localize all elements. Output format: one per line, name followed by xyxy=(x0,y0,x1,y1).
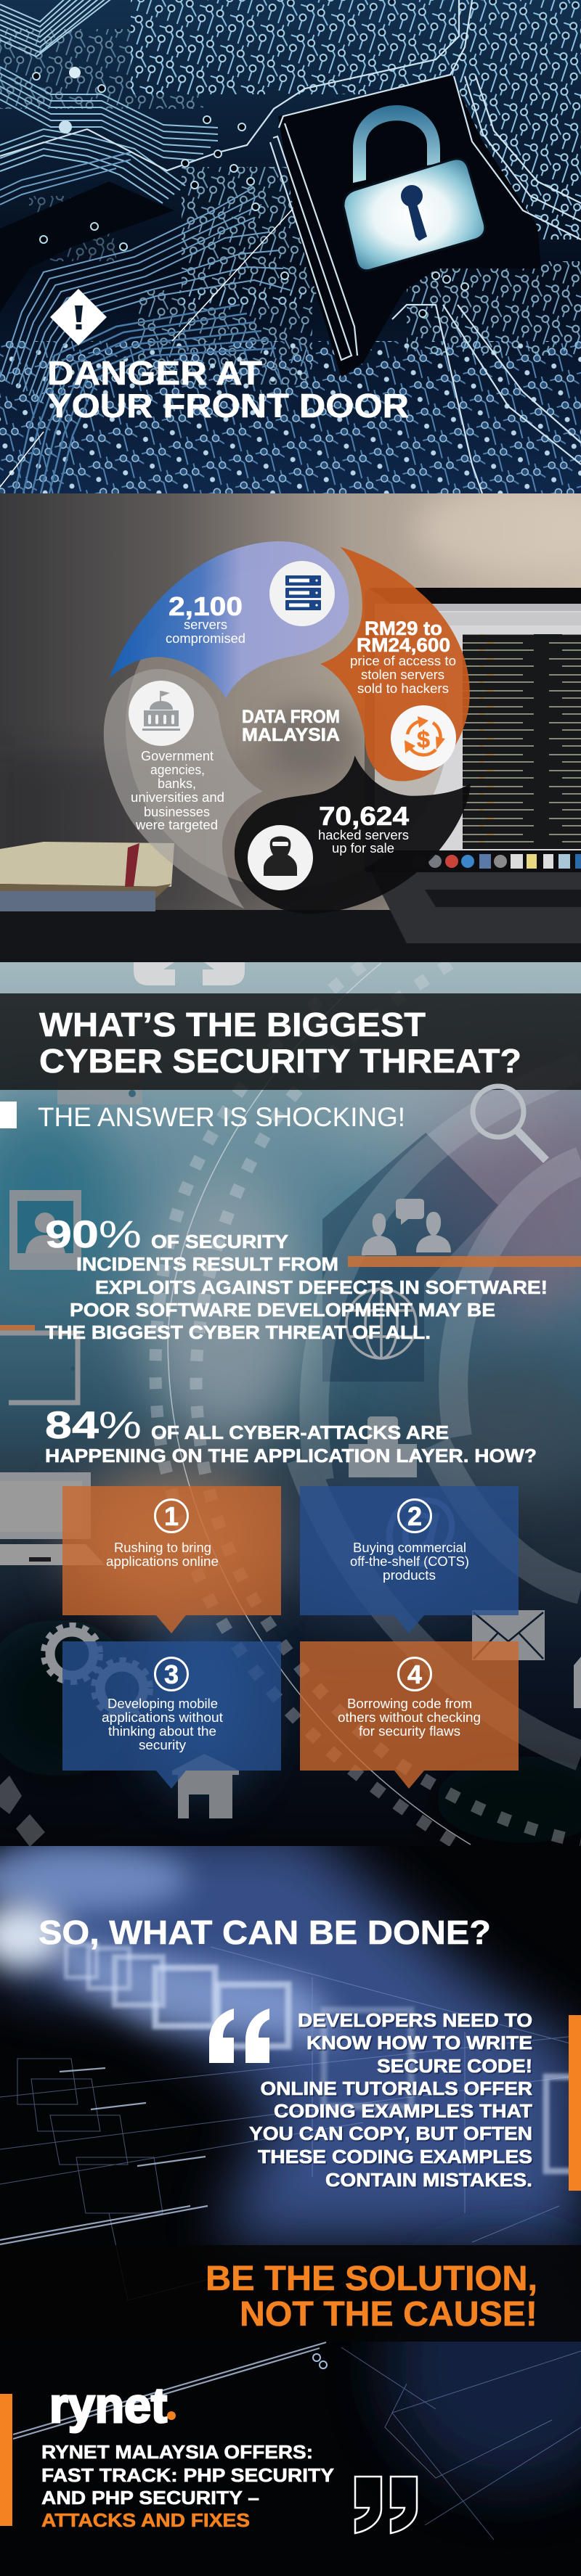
icon: magnifier xyxy=(473,1086,546,1160)
icon: envelope xyxy=(472,1610,545,1660)
text: targets: were targeted xyxy=(135,818,218,832)
text: developers quote: YOU CAN COPY, BUT OFTEN xyxy=(249,2124,532,2144)
card 1: rushing: Rushing to bring xyxy=(114,1541,211,1555)
icon: globe xyxy=(346,1289,416,1358)
text: servers compromised: compromised xyxy=(166,631,245,646)
icon: dollar cycle: $ xyxy=(417,726,430,752)
text: servers compromised: servers xyxy=(184,618,227,632)
text: developers quote: THESE CODING EXAMPLES xyxy=(258,2147,532,2167)
icon: top arrows xyxy=(134,962,245,985)
card 4: borrowing xyxy=(300,1641,519,1789)
subheading: the answer is shocking: THE ANSWER IS SHOCKING! xyxy=(38,1102,405,1132)
text: developers quote: SECURE CODE! xyxy=(377,2056,532,2077)
card 2: COTS: products xyxy=(383,1568,436,1583)
text: targets: universities and xyxy=(131,790,224,805)
text: developers quote: KNOW HOW TO WRITE xyxy=(306,2033,532,2054)
title: danger at your front door: YOUR FRONT DOOR xyxy=(47,387,409,424)
text: 84 percent stat: OF ALL CYBER-ATTACKS ARE xyxy=(151,1422,449,1443)
title band: WHAT’S THE BIGGEST xyxy=(39,1006,426,1043)
shape: black segment xyxy=(235,755,471,914)
card 3: mobile xyxy=(62,1641,281,1789)
icon: warning diamond xyxy=(50,289,107,345)
icon: laptop xyxy=(0,1472,105,1565)
icon: government building xyxy=(129,681,194,746)
text: price of access: price of access to xyxy=(350,654,456,668)
text: developers quote: CONTAIN MISTAKES. xyxy=(325,2170,532,2191)
text: targets: banks, xyxy=(158,776,196,791)
icon: house xyxy=(172,1754,239,1818)
text: price of access: RM29 to xyxy=(365,618,442,639)
text: 84 percent stat: HAPPENING ON THE APPLICATION LAYER. HOW? xyxy=(45,1445,537,1467)
card 3: mobile: applications without xyxy=(102,1710,223,1725)
data wheel xyxy=(104,541,471,914)
text: hacked servers: up for sale xyxy=(332,841,394,856)
text: targets: agencies, xyxy=(150,763,205,777)
title: danger at your front door xyxy=(47,361,408,418)
card 1: rushing: 1 xyxy=(164,1501,179,1531)
text: 84 percent stat: 84 % xyxy=(45,1404,142,1447)
text: price of access xyxy=(350,618,456,696)
text: price of access: RM24,600 xyxy=(357,634,450,656)
card 2: COTS: @ xyxy=(381,1482,460,1572)
icon: tablet xyxy=(0,1333,78,1403)
icon: hacker xyxy=(248,825,313,890)
dotted arcs xyxy=(155,963,581,1845)
panel: biggest threat xyxy=(0,962,581,1847)
text: targets xyxy=(131,749,224,832)
card 4: borrowing: 4 xyxy=(407,1660,422,1689)
icon: dollar cycle xyxy=(391,705,456,771)
card 2: COTS: off-the-shelf (COTS) xyxy=(350,1554,469,1569)
text: servers compromised xyxy=(166,596,245,646)
title: danger at your front door: DANGER AT xyxy=(47,354,262,392)
heading: so what can be done: SO, WHAT CAN BE DONE? xyxy=(38,1913,491,1951)
text: course offer: RYNET MALAYSIA OFFERS: xyxy=(41,2441,313,2463)
callout: be the solution: BE THE SOLUTION, xyxy=(206,2260,537,2298)
icon: lock xyxy=(57,1034,142,1104)
panel: data from Malaysia xyxy=(0,486,581,962)
card 2: COTS: Buying commercial xyxy=(353,1541,466,1555)
icon: photo frame xyxy=(9,1190,81,1270)
text: developers quote xyxy=(249,2011,532,2191)
text: price of access: sold to hackers xyxy=(357,681,449,696)
logo: rynet: rynet xyxy=(49,2378,167,2433)
text: hacked servers: 70,624 xyxy=(319,801,409,831)
thin circuit lines xyxy=(0,1947,581,2540)
text: developers quote: ONLINE TUTORIALS OFFER xyxy=(260,2079,532,2099)
shape: grey segment xyxy=(104,669,263,909)
text: course offer: AND PHP SECURITY – xyxy=(41,2487,259,2509)
card 3: mobile: Developing mobile xyxy=(107,1697,218,1711)
heading: data from Malaysia: DATA FROM xyxy=(242,707,340,727)
card 4: borrowing: Borrowing code from xyxy=(347,1697,472,1711)
glowing frames xyxy=(66,1945,581,2171)
heading: data from Malaysia: MALAYSIA xyxy=(242,725,340,745)
icon: padlock xyxy=(344,105,485,271)
text: course offer: FAST TRACK: PHP SECURITY xyxy=(41,2464,334,2486)
card 3: mobile: thinking about the xyxy=(108,1724,216,1739)
title band xyxy=(0,993,581,1090)
books xyxy=(0,842,174,911)
text: developers quote: DEVELOPERS NEED TO xyxy=(298,2011,532,2031)
card 3: mobile: security xyxy=(139,1738,186,1752)
text: 90 percent stat xyxy=(45,1213,548,1343)
callout: be the solution: NOT THE CAUSE! xyxy=(240,2295,537,2334)
card 2: COTS xyxy=(300,1482,519,1633)
heading: data from Malaysia xyxy=(243,710,340,742)
title band: CYBER SECURITY THREAT? xyxy=(39,1042,521,1080)
card 2: COTS: 2 xyxy=(407,1501,422,1531)
card 4: borrowing: for security flaws xyxy=(359,1724,460,1739)
card 1: rushing: applications online xyxy=(106,1554,219,1569)
text: targets: Government xyxy=(141,749,214,763)
icon: people chat xyxy=(362,1199,451,1255)
text: 90 percent stat: 90 % xyxy=(45,1213,142,1256)
panel: what can be done xyxy=(0,1829,581,2576)
text: 90 percent stat: THE BIGGEST CYBER THREAT OF ALL. xyxy=(45,1321,431,1343)
text: hacked servers: hacked servers xyxy=(318,828,409,842)
text: 90 percent stat: EXPLOITS AGAINST DEFECTS IN SOFTWARE! xyxy=(95,1276,548,1298)
text: 84 percent stat xyxy=(45,1404,537,1467)
card 4: borrowing: others without checking xyxy=(338,1710,481,1725)
icon: server rack xyxy=(349,1416,417,1477)
text: course offer: ATTACKS AND FIXES xyxy=(41,2509,250,2531)
card 1: rushing xyxy=(62,1486,281,1633)
text: developers quote: CODING EXAMPLES THAT xyxy=(274,2101,532,2122)
text: hacked servers xyxy=(318,801,409,856)
icon: opening quote xyxy=(209,2009,269,2063)
text: 90 percent stat: OF SECURITY xyxy=(151,1231,288,1252)
text: servers compromised: 2,100 xyxy=(168,591,243,621)
card 3: mobile: 3 xyxy=(164,1660,179,1689)
icon: gears xyxy=(44,1625,150,1717)
text: targets: businesses xyxy=(144,805,210,819)
text: course offer xyxy=(41,2441,334,2531)
laptop xyxy=(365,588,581,943)
shape: blue segment xyxy=(109,541,349,698)
callout: be the solution xyxy=(0,2245,581,2342)
text: price of access: stolen servers xyxy=(361,668,444,682)
text: 90 percent stat: POOR SOFTWARE DEVELOPMENT MAY BE xyxy=(70,1299,495,1321)
icon: closing quote xyxy=(355,2477,417,2533)
shape: orange segment xyxy=(320,547,470,782)
icon: server xyxy=(269,561,335,626)
text: 90 percent stat: INCIDENTS RESULT FROM xyxy=(76,1253,338,1275)
panel: danger hero xyxy=(0,0,581,493)
